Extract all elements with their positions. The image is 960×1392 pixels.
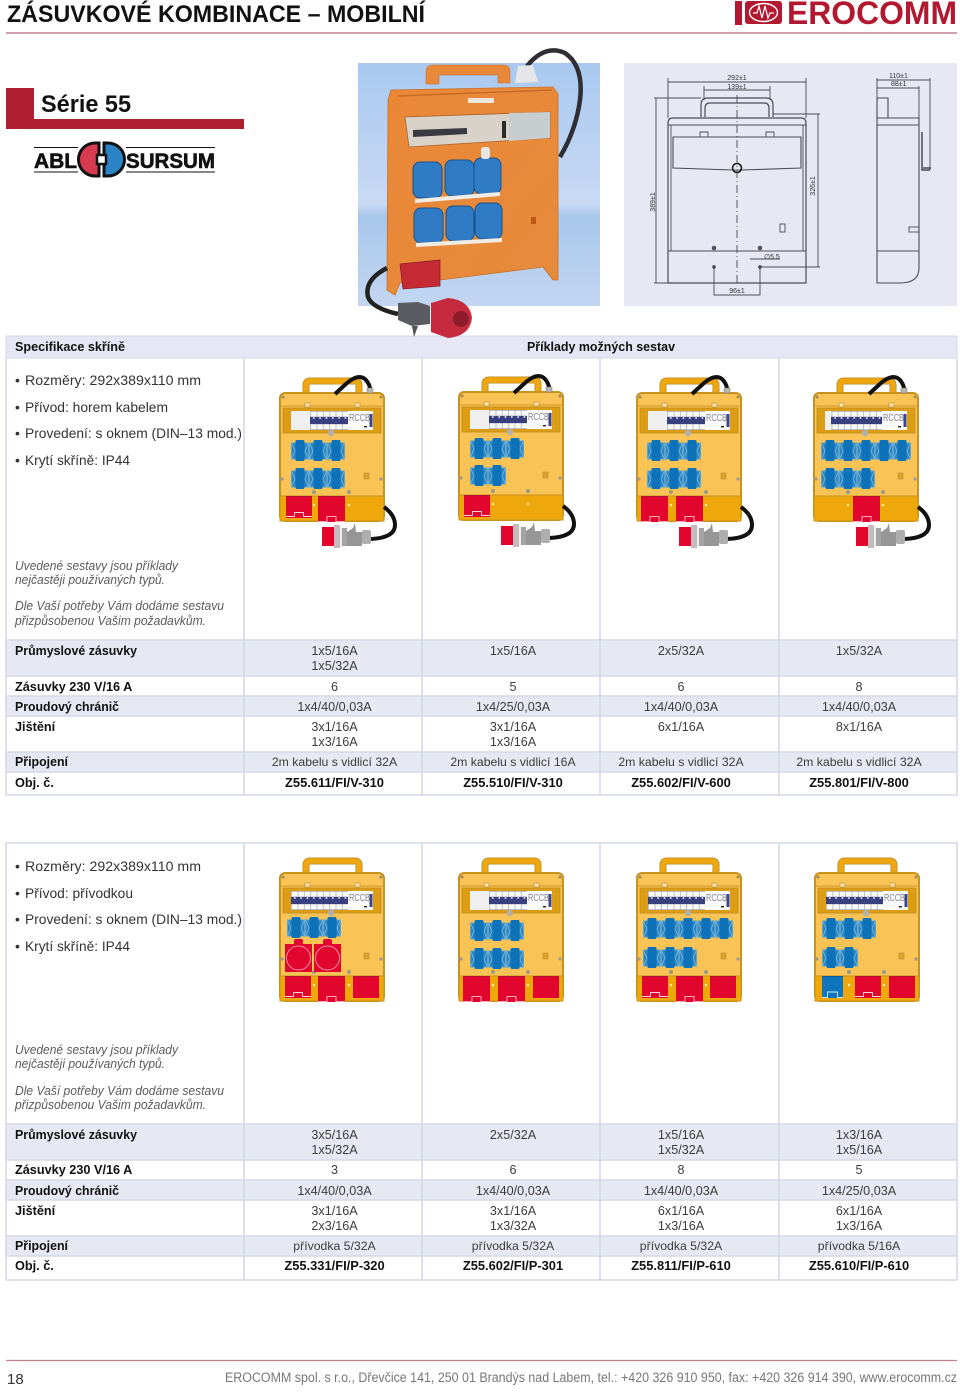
table 2 row: Jištění: 3x1/16A [311,1204,358,1218]
table 1 row: Připojení: 2m kabelu s vidlicí 16A [450,755,576,769]
table 2 row: Zásuvky 230 V [15,1163,863,1177]
spec list 1: Přívod: horem kabelem [25,399,168,415]
drawing dimension labels: 88±1 [891,81,907,88]
blue socket [822,976,843,998]
spec list 1 [15,372,242,468]
note 1: nejčastěji používaných typů. [15,573,165,587]
table 2 row: Průmyslové zásuvky: 1x5/32A [658,1143,705,1157]
unit: Z55.801/FI/V-800 [814,377,929,548]
table 1 header: Specifikace skříně [15,340,125,354]
table 1 header [6,336,957,358]
table 1 row: Jištění: 3x1/16A [311,720,358,734]
table 2 row: Jištění: 6x1/16A [658,1204,705,1218]
unit: Z55.801/FI/V-800: RCCB [883,413,904,424]
table 1 row: Připojení: 2m kabelu s vidlicí 32A [796,755,922,769]
table 2 row: Proudový chránič [15,1184,897,1198]
table 2 row: Průmyslové zásuvky: 2x5/32A [490,1128,537,1142]
unit: Z55.610/FI/P-610: RCCB [884,893,905,904]
title: ZÁSUVKOVÉ KOMBINACE – MOBILNÍ [7,0,426,28]
note 1 [14,559,224,628]
unit: Z55.610/FI/P-610 [815,861,919,1001]
table 2 row: Průmyslové zásuvky: Průmyslové zásuvky [15,1128,137,1142]
table 2 row: Připojení: přívodka 5/32A [293,1239,377,1253]
spec list 2: • [15,911,20,927]
table 2 row: Obj. č. [15,1258,909,1273]
table 2 row: Zásuvky 230 V: 3 [331,1163,338,1177]
note 1: přizpůsobenou Vašim požadavkům. [14,614,206,628]
spec list 2: Provedení: s oknem (DIN–13 mod.) [25,911,242,927]
logo: ABL Sursum [34,143,215,176]
table 2 row: Obj. č.: Z55.610/FI/P-610 [809,1258,909,1273]
table 2 row: Průmyslové zásuvky: 1x5/32A [311,1143,358,1157]
table 1 row: Zásuvky 230 V: 6 [677,680,685,694]
spec list 1: • [15,452,20,468]
note 1: Dle Vaší potřeby Vám dodáme sestavu [15,599,224,613]
drawing dimension labels: 326±1 [810,176,817,196]
note 2: nejčastěji používaných typů. [15,1057,165,1071]
table 1 row: Zásuvky 230 V: 5 [509,680,517,694]
spec list 2: • [15,858,20,874]
table 2 row: Připojení: Připojení [15,1239,68,1253]
table 2 row: Jištění [15,1204,883,1233]
table 2 row: Připojení: přívodka 5/16A [818,1239,901,1253]
spec list 2: Rozměry: 292x389x110 mm [25,858,201,874]
table 1 row: Zásuvky 230 V: 8 [855,680,863,694]
table 1 row: Průmyslové zásuvky: 1x5/32A [311,659,358,673]
drawing dimension labels [650,73,908,295]
drawing dimension labels: 110±1 [889,73,908,80]
table 2 row: Jištění: 1x3/32A [490,1219,537,1233]
spec list 2: Přívod: přívodkou [25,885,133,901]
spec list 2: • [15,885,20,901]
table 2 row: Obj. č.: Z55.811/FI/P-610 [631,1258,731,1273]
table 1 row: Obj. č.: Z55.602/FI/V-600 [631,775,731,790]
table 2 row: Zásuvky 230 V: 6 [509,1163,517,1177]
unit: Z55.602/FI/V-600 [637,377,752,548]
table 1 row: Připojení [15,755,922,769]
table 1 row: Obj. č.: Z55.801/FI/V-800 [809,775,909,790]
table 2 row: Obj. č.: Z55.602/FI/P-301 [463,1258,563,1273]
logo: ABL Sursum: SURSUM [126,150,215,173]
table 1 row: Průmyslové zásuvky [15,644,883,673]
table 2 row: Obj. č.: Z55.331/FI/P-320 [284,1258,385,1273]
unit: Z55.602/FI/V-600: RCCB [706,413,727,424]
red CEE sockets [285,939,341,972]
table 1 row: Proudový chránič: Proudový chránič [15,700,119,714]
unit: Z55.811/FI/P-610 [637,861,741,1002]
note 2: přizpůsobenou Vašim požadavkům. [14,1098,206,1112]
table 2 row: Jištění: 1x3/16A [836,1219,883,1233]
table 1 row: Jištění: Jištění [15,720,56,734]
drawing dimension labels: ∅5.5 [764,254,780,261]
table 2 row: Proudový chránič: 1x4/40/0,03A [297,1184,372,1198]
table 1 row: Proudový chránič: 1x4/40/0,03A [297,700,372,714]
spec list 2: • [15,938,20,954]
table 2 row: Průmyslové zásuvky: 1x5/16A [836,1143,883,1157]
logo: ABL Sursum: ABL [34,150,77,173]
note 1: Uvedené sestavy jsou příklady [15,559,179,573]
technical drawing [624,63,957,306]
product photo [358,50,600,338]
table 2 row: Proudový chránič: 1x4/25/0,03A [822,1184,897,1198]
table 1 row: Jištění: 1x3/16A [490,735,537,749]
table 1 row: Proudový chránič: 1x4/25/0,03A [476,700,551,714]
table 1 row: Proudový chránič: 1x4/40/0,03A [822,700,897,714]
table 2 row: Jištění: 2x3/16A [311,1219,358,1233]
table 1 row: Jištění [15,720,883,749]
table 2 row: Jištění: 1x3/16A [658,1219,705,1233]
table 1 header: Příklady možných sestav [527,340,675,354]
table 2 row: Připojení: přívodka 5/32A [472,1239,555,1253]
unit: Z55.331/FI/P-320 [280,861,384,1002]
unit: Z55.602/FI/P-301: RCCB [528,893,549,904]
table 2 row: Průmyslové zásuvky: 3x5/16A [311,1128,358,1142]
table 1 row: Proudový chránič: 1x4/40/0,03A [644,700,719,714]
table 1 row: Jištění: 3x1/16A [490,720,537,734]
table 1 row: Jištění: 6x1/16A [658,720,705,734]
table 1 row: Obj. č.: Z55.510/FI/V-310 [463,775,563,790]
table 1 row: Průmyslové zásuvky: 1x5/16A [490,644,537,658]
table 1 row: Jištění: 8x1/16A [836,720,883,734]
table 2 row: Připojení: přívodka 5/32A [640,1239,723,1253]
drawing dimension labels: 389±1 [650,192,657,212]
table 2 row: Zásuvky 230 V: 8 [677,1163,685,1177]
note 2: Dle Vaší potřeby Vám dodáme sestavu [15,1084,224,1098]
spec list 1: • [15,399,20,415]
table 1 row: Obj. č.: Obj. č. [15,776,54,790]
unit: Z55.611/FI/V-310 [280,377,395,548]
table 1 row: Obj. č. [15,775,909,790]
table 2 row: Proudový chránič: 1x4/40/0,03A [476,1184,551,1198]
table 2 row: Jištění: 3x1/16A [490,1204,537,1218]
table 1 row: Připojení: 2m kabelu s vidlicí 32A [272,755,398,769]
table 2 row: Zásuvky 230 V: 5 [855,1163,863,1177]
table 2 row: Zásuvky 230 V: Zásuvky 230 V/16 A [15,1163,132,1177]
spec list 1: Provedení: s oknem (DIN–13 mod.) [25,425,242,441]
drawing dimension labels: 139±1 [727,84,747,91]
unit: Z55.510/FI/V-310 [459,376,574,547]
spec list 1: • [15,372,20,388]
page number: 18 [7,1371,24,1388]
table 1 row: Průmyslové zásuvky: 2x5/32A [658,644,705,658]
table 1 row: Obj. č.: Z55.611/FI/V-310 [285,775,384,790]
spec list 1: • [15,425,20,441]
note 2 [14,1043,224,1112]
drawing dimension labels: 96±1 [729,288,745,295]
unit: Z55.611/FI/V-310: RCCB [349,413,370,424]
table 1 row: Průmyslové zásuvky: 1x5/16A [311,644,358,658]
table 1 row: Připojení: Připojení [15,755,68,769]
table 2 row: Průmyslové zásuvky [15,1128,883,1157]
table 1 row: Průmyslové zásuvky: 1x5/32A [836,644,883,658]
spec list 2 [15,858,242,954]
unit: Z55.811/FI/P-610: RCCB [706,893,727,904]
table 1 row: Proudový chránič [15,700,897,714]
unit: Z55.510/FI/V-310: RCCB [528,412,549,423]
drawing dimension labels: 292±1 [727,75,747,82]
table 2 row: Jištění: 6x1/16A [836,1204,883,1218]
spec list 1: Rozměry: 292x389x110 mm [25,372,201,388]
spec list 2: Krytí skříně: IP44 [25,938,130,954]
table 2 row: Průmyslové zásuvky: 1x3/16A [836,1128,883,1142]
table 2 row: Obj. č.: Obj. č. [15,1259,54,1273]
table 1 row: Zásuvky 230 V: 6 [331,680,338,694]
note 2: Uvedené sestavy jsou příklady [15,1043,179,1057]
unit: Z55.331/FI/P-320: RCCB [349,893,370,904]
unit: Z55.602/FI/P-301 [459,861,563,1002]
table 2 row: Proudový chránič: 1x4/40/0,03A [644,1184,719,1198]
spec list 1: Krytí skříně: IP44 [25,452,130,468]
table 2 row: Průmyslové zásuvky: 1x5/16A [658,1128,705,1142]
table 1 row: Zásuvky 230 V [15,680,863,694]
table 1 row: Připojení: 2m kabelu s vidlicí 32A [618,755,744,769]
table 1 row: Průmyslové zásuvky: Průmyslové zásuvky [15,644,137,658]
heading: Série 55: Série 55 [41,91,131,118]
table 1 row: Jištění: 1x3/16A [311,735,358,749]
table 2 grid and bands [6,843,957,1280]
table 2 row: Proudový chránič: Proudový chránič [15,1184,119,1198]
heading: Série 55 [6,88,244,129]
table 2 row: Připojení [15,1239,901,1253]
table 1 row: Zásuvky 230 V: Zásuvky 230 V/16 A [15,680,132,694]
table 2 row: Jištění: Jištění [15,1204,56,1218]
table 1 grid and bands [6,358,957,795]
